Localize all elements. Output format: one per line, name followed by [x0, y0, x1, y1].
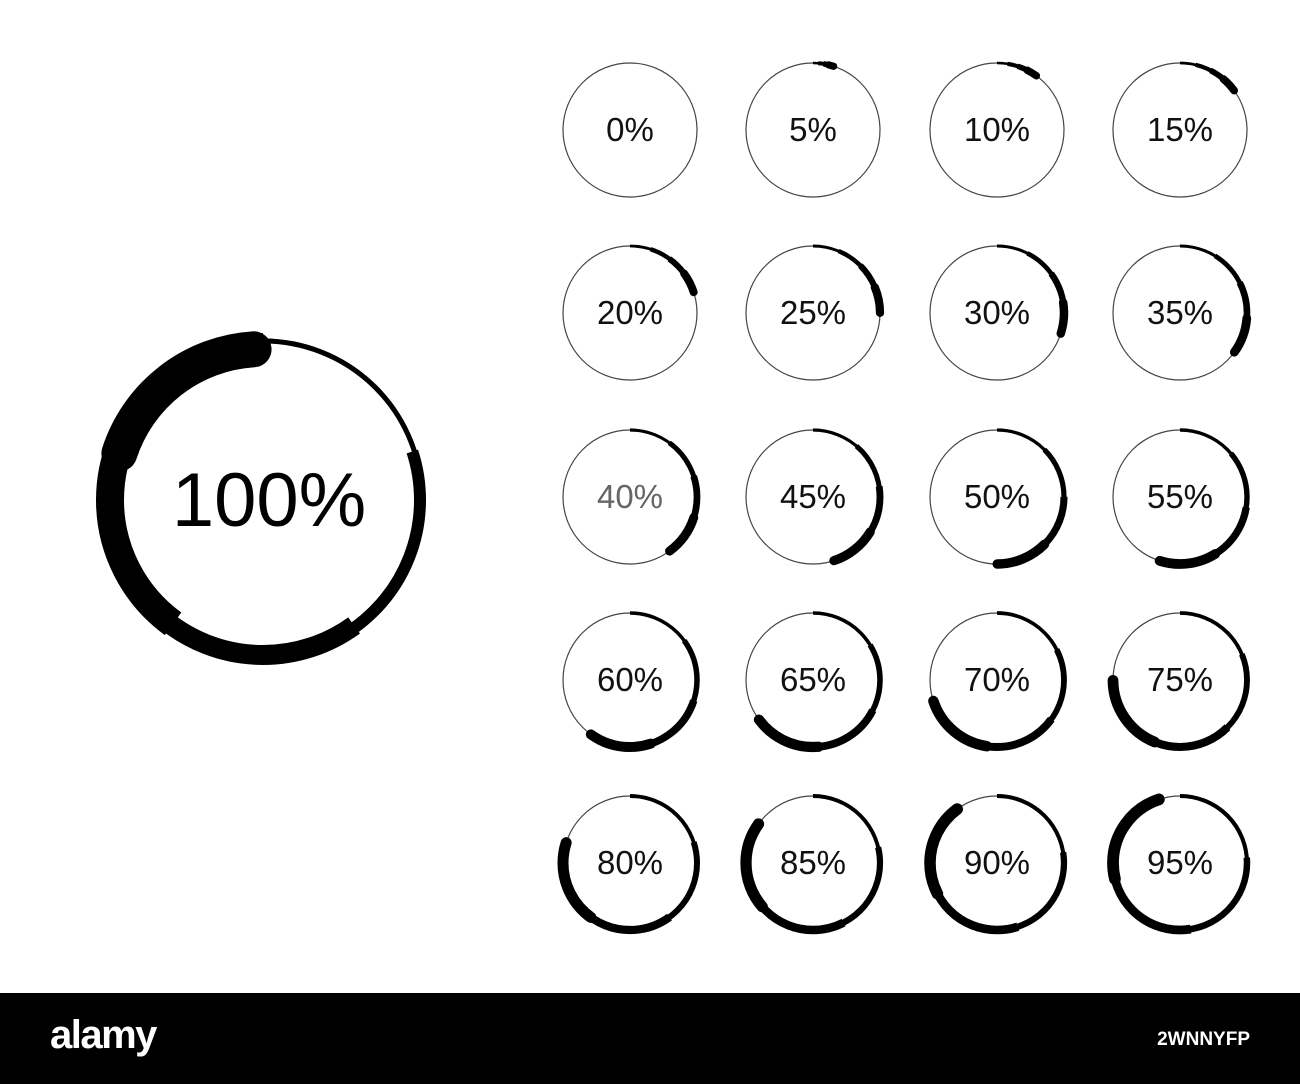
chart 40%: 40%: [597, 478, 663, 515]
chart 5%: 5%: [789, 111, 837, 148]
chart 65%: 65%: [780, 661, 846, 698]
chart 75%: [1113, 613, 1247, 747]
image id: 2WNNYFP: [1157, 1029, 1250, 1050]
chart 25%: 25%: [780, 294, 846, 331]
chart 80%: [563, 796, 697, 930]
chart 45%: 45%: [780, 478, 846, 515]
chart 25%: [746, 246, 880, 380]
big chart: 100%: [103, 340, 423, 660]
logo: alamy: alamy: [50, 1013, 158, 1057]
chart 70%: [930, 613, 1064, 747]
footer bar: [0, 993, 1300, 1084]
chart 10%: [930, 63, 1064, 197]
chart 80%: 80%: [597, 844, 663, 881]
chart 90%: 90%: [964, 844, 1030, 881]
chart 75%: 75%: [1147, 661, 1213, 698]
chart 60%: [563, 613, 697, 747]
chart 30%: 30%: [964, 294, 1030, 331]
chart 90%: [930, 796, 1064, 930]
chart 50%: 50%: [964, 478, 1030, 515]
chart 15%: [1113, 63, 1247, 197]
chart 35%: [1113, 246, 1247, 380]
chart 20%: [563, 246, 697, 380]
chart 50%: [930, 430, 1064, 564]
big chart: 100%: 100%: [172, 458, 366, 543]
chart 45%: [746, 430, 880, 564]
chart 15%: 15%: [1147, 111, 1213, 148]
chart 85%: 85%: [780, 844, 846, 881]
chart 55%: 55%: [1147, 478, 1213, 515]
chart 0%: [563, 63, 697, 197]
chart 95%: [1113, 796, 1247, 930]
chart 55%: [1113, 430, 1247, 564]
chart 60%: 60%: [597, 661, 663, 698]
chart 70%: 70%: [964, 661, 1030, 698]
chart 40%: [563, 430, 697, 564]
chart 10%: 10%: [964, 111, 1030, 148]
chart 35%: 35%: [1147, 294, 1213, 331]
chart 5%: [746, 63, 880, 197]
chart 0%: 0%: [606, 111, 654, 148]
chart 85%: [746, 796, 880, 930]
chart 20%: 20%: [597, 294, 663, 331]
chart 65%: [746, 613, 880, 747]
chart 95%: 95%: [1147, 844, 1213, 881]
chart 30%: [930, 246, 1064, 380]
